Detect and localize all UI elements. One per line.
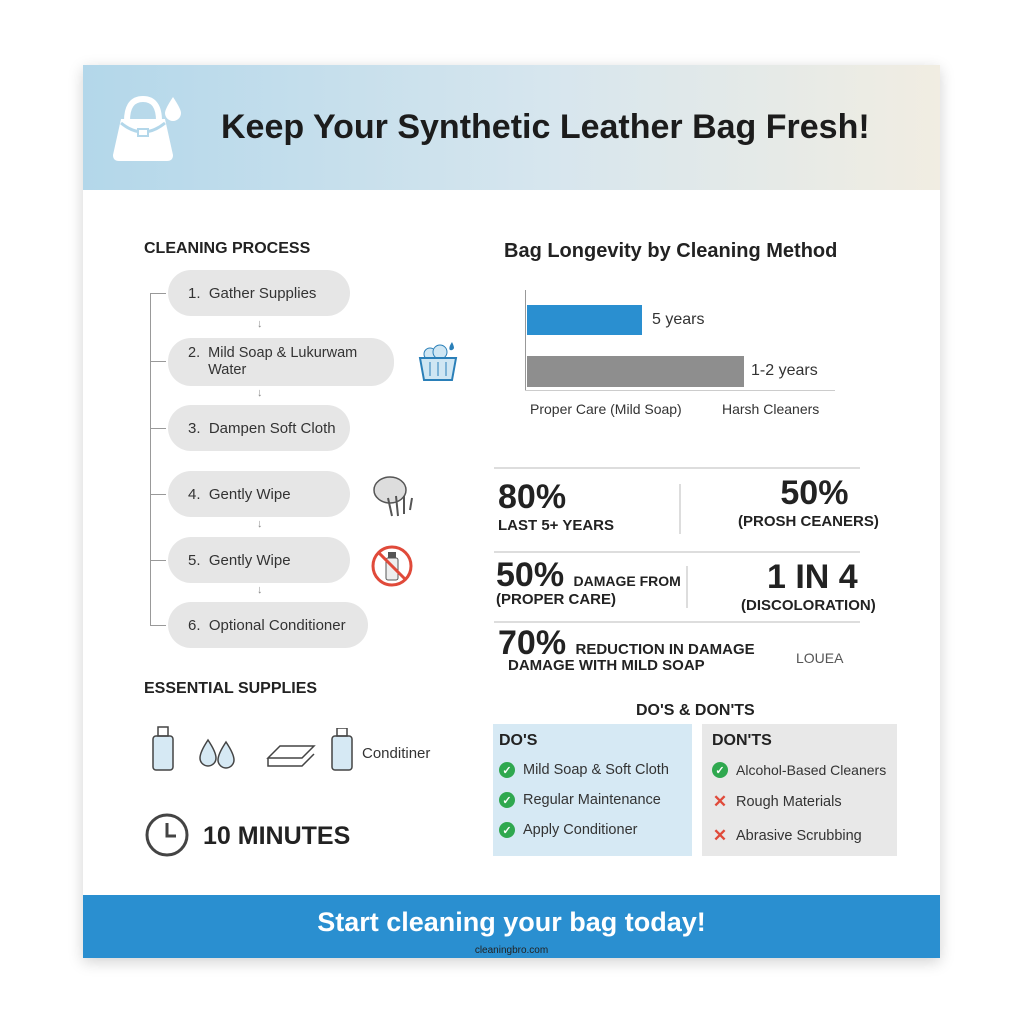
title: Keep Your Synthetic Leather Bag Fresh!: [221, 108, 870, 146]
chart: bag longevity: Harsh Cleaners: [722, 401, 819, 417]
stat 70%: 70% REDUCTION IN DAMAGE: [498, 624, 755, 662]
panel: don'ts: ✕: [713, 826, 727, 845]
step 4: [168, 471, 350, 517]
stat 1 in 4: (DISCOLORATION): [741, 597, 876, 614]
panel: don'ts: ✓: [715, 764, 725, 776]
icon: bag: [113, 96, 181, 161]
panel: do's: Regular Maintenance: [523, 792, 661, 808]
step 3: 3. Dampen Soft Cloth: [188, 420, 336, 436]
step 1: [168, 270, 350, 316]
stat 50% damage: (PROPER CARE): [496, 591, 616, 608]
step 2: 2. Mild Soap & Lukurwam: [188, 345, 357, 361]
supplies icons: Conditiner: [362, 745, 430, 762]
stats: [494, 467, 879, 674]
text: ↓: [257, 387, 262, 399]
stat 1 in 4: 1 IN 4: [767, 558, 858, 596]
stat 50%: 50%: [780, 474, 848, 512]
panel: do's: ✓: [502, 824, 512, 836]
icon: no spray: [372, 546, 412, 586]
step 5: 5. Gently Wipe: [188, 552, 291, 568]
text: ↓: [257, 318, 262, 330]
stat 80%: [498, 478, 614, 534]
stat 80%: 80%: [498, 478, 566, 516]
stat 70%: DAMAGE WITH MILD SOAP: [508, 657, 705, 674]
step 2: Water: [208, 362, 246, 378]
step 1: 1. Gather Supplies: [188, 284, 316, 302]
panel: do's: [493, 724, 692, 856]
stat 50%: [738, 474, 879, 530]
panel: do's: ✓: [502, 794, 512, 806]
header: [83, 65, 940, 190]
panel: don'ts: DON'TS: [712, 732, 772, 749]
heading: essential supplies: ESSENTIAL SUPPLIES: [144, 680, 317, 697]
panel: don'ts: [702, 724, 897, 856]
step 3: [168, 405, 350, 451]
heading: cleaning process: CLEANING PROCESS: [144, 240, 310, 257]
stat 80%: LAST 5+ YEARS: [498, 517, 614, 534]
step 6: 6. Optional Conditioner: [188, 616, 346, 634]
panel: don'ts: Alcohol-Based Cleaners: [736, 762, 886, 778]
text: ↓: [257, 518, 262, 530]
footer banner: Start cleaning your bag today!: [317, 907, 706, 937]
step 6: [168, 602, 368, 648]
step 2: [168, 338, 394, 386]
panel: don'ts: Rough Materials: [736, 794, 842, 810]
supplies icons: [152, 726, 430, 771]
panel: don'ts: ✕: [713, 792, 727, 811]
chart: bag longevity: Bag Longevity by Cleaning Method: [504, 240, 837, 262]
icon: basket: [418, 342, 458, 381]
panel: do's: Mild Soap & Soft Cloth: [523, 762, 669, 778]
icon: wiping hand: [373, 476, 413, 516]
chart: bag longevity: Proper Care (Mild Soap): [530, 401, 682, 417]
heading: do's & don'ts: DO'S & DON'TS: [636, 702, 755, 719]
stat 50% damage: 50% DAMAGE FROM: [496, 556, 681, 594]
chart: bag longevity: 1-2 years: [751, 362, 818, 379]
footer banner: [83, 895, 940, 958]
time: 10 MINUTES: [203, 822, 350, 850]
step 5: [168, 537, 350, 583]
stat 1 in 4: [741, 558, 876, 614]
step 4: 4. Gently Wipe: [188, 486, 291, 502]
chart: bag longevity: 5 years: [652, 311, 704, 328]
chart: bag longevity: [504, 240, 837, 417]
time: [146, 814, 350, 856]
stats: LOUEA: [796, 650, 843, 666]
footer banner: cleaningbro.com: [475, 945, 548, 956]
text: ↓: [257, 584, 262, 596]
panel: do's: DO'S: [499, 732, 537, 749]
panel: do's: ✓: [502, 764, 512, 776]
card: [83, 65, 940, 958]
panel: do's: Apply Conditioner: [523, 822, 637, 838]
panel: don'ts: Abrasive Scrubbing: [736, 828, 862, 844]
stat 50%: (PROSH CEANERS): [738, 513, 879, 530]
